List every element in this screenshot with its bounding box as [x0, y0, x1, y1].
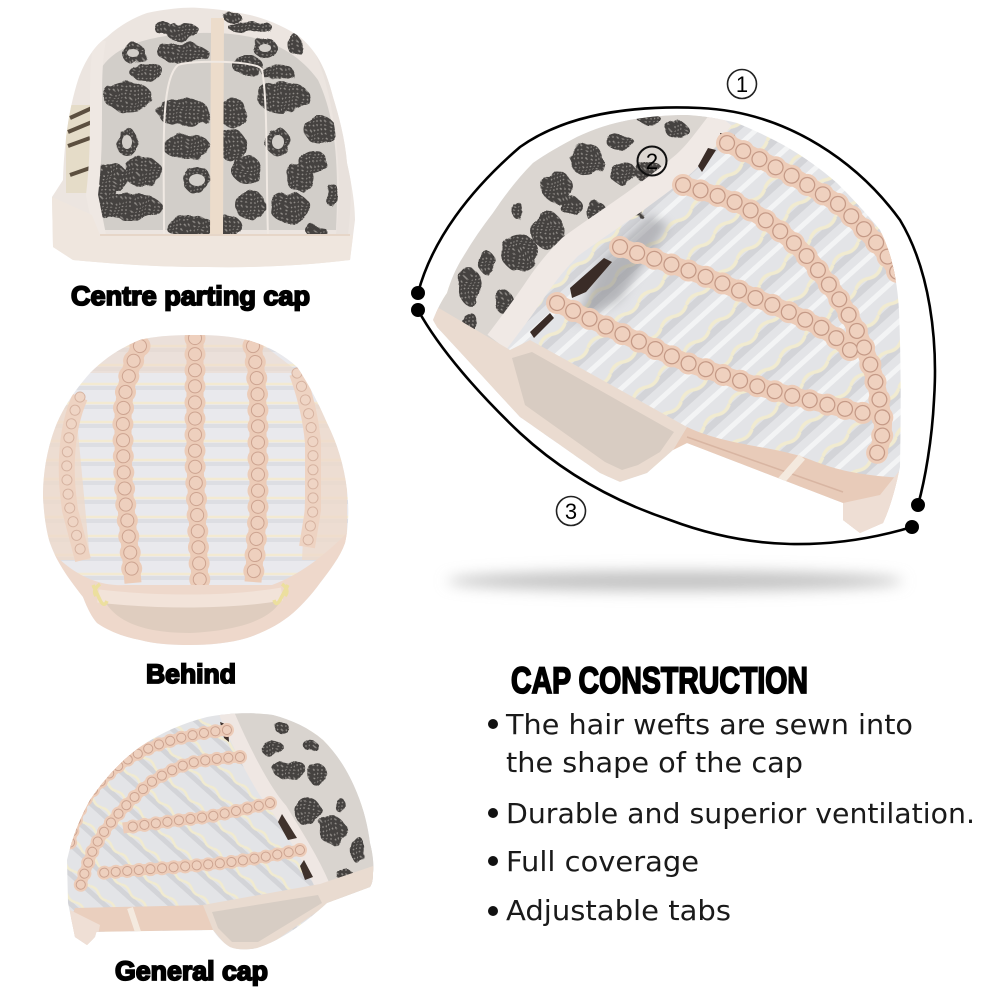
bottom band: [52, 206, 353, 268]
left side hair wefts: [66, 105, 90, 193]
lace floral blotches: [99, 14, 336, 236]
bullet 4: Adjustable tabs: [506, 894, 731, 927]
white lace border: [226, 712, 326, 895]
rim and velcro: [56, 534, 347, 645]
rim band: [60, 905, 215, 945]
number 1: 1: [736, 72, 748, 97]
lace blotches: [460, 116, 687, 331]
dark gaps: [530, 133, 735, 338]
white lace border: [497, 118, 722, 342]
number 1: [728, 70, 756, 98]
number 3: [556, 496, 586, 526]
number 2: [638, 146, 666, 176]
label: centre parting cap: Centre parting cap: [71, 281, 310, 311]
elastic strap: [98, 594, 282, 601]
bullet 3: Full coverage: [506, 845, 699, 878]
strap: [780, 457, 802, 482]
centre parting strip: [210, 18, 224, 236]
dark gaps: [220, 722, 313, 880]
bullet 1: [488, 708, 913, 779]
front band and tab: [430, 307, 687, 482]
lace flower centres: [122, 44, 284, 186]
heading: cap construction: CAP CONSTRUCTION: [511, 660, 808, 701]
closure stitching: [164, 62, 268, 236]
lace panel: [230, 713, 374, 900]
rear tab end: [843, 472, 899, 533]
photo: behind view of cap: [40, 330, 350, 650]
edge lace: [43, 400, 90, 560]
tab: [203, 865, 380, 950]
arc 3: bottom curve with end dots: [411, 303, 919, 544]
ring strips: [67, 338, 313, 585]
clips: [93, 584, 288, 604]
feature list: [488, 708, 975, 927]
photo: general cap: [67, 713, 374, 950]
rim band: [673, 427, 905, 540]
photo: centre parting cap: [52, 8, 355, 268]
arc 1: top curve with end dots: [411, 107, 935, 512]
lace blotches: [262, 724, 364, 880]
dark hair shading near lace: [575, 215, 668, 325]
ring strips: [557, 143, 900, 453]
number 3: 3: [565, 499, 577, 524]
floor shadow: [447, 571, 903, 591]
bullet 1: The hair wefts are sewn into: [505, 708, 913, 741]
ring strips: [70, 730, 300, 887]
lace mesh panel: [98, 33, 337, 230]
number 2: 2: [646, 149, 658, 174]
label: general cap: General cap: [115, 956, 268, 986]
white lace border: [92, 40, 100, 235]
photo: main cap side view: [425, 100, 905, 540]
lace panel: [437, 115, 718, 341]
label: behind: Behind: [146, 659, 236, 689]
bullet 1: the shape of the cap: [506, 746, 803, 779]
bullet 2: Durable and superior ventilation.: [506, 797, 975, 830]
